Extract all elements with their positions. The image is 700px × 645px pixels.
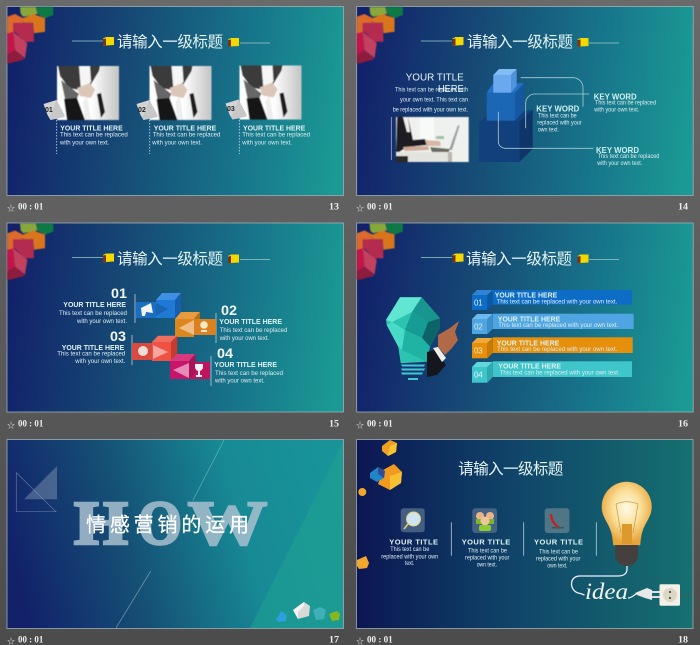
column 3: own text.	[547, 562, 568, 569]
chart: stacked blocks	[479, 69, 533, 162]
bar 04: 04	[474, 371, 483, 380]
text 01: This text can be replaced	[59, 310, 128, 317]
icon: corner cubes	[357, 224, 403, 280]
key word 1: KEY WORD	[536, 104, 579, 114]
left text block: This text can be replaced with	[395, 86, 468, 93]
footer 14: 14	[678, 202, 688, 212]
footer 14	[356, 202, 688, 213]
key word 3: with your own text.	[596, 160, 643, 167]
footer 14: ☆	[356, 204, 364, 213]
title	[72, 33, 270, 51]
text 01: YOUR TITLE HERE	[63, 300, 126, 309]
left text block: be replaced with your own text.	[393, 106, 468, 113]
key word 2: with your own text.	[593, 107, 640, 114]
column 3: This text can be	[539, 548, 578, 555]
watermark: HOW: W	[188, 490, 267, 558]
panel: slide 16	[356, 223, 693, 430]
panel: slide 18	[356, 440, 693, 645]
footer 16: 16	[678, 420, 688, 430]
bar 01: YOUR TITLE HERE	[495, 291, 557, 300]
bar 03	[472, 337, 633, 358]
panel: slide 15	[7, 223, 344, 430]
item 01: This text can be replaced	[60, 132, 128, 139]
footer 17	[7, 636, 339, 645]
text 04: 04	[217, 345, 233, 361]
column 1: text.	[405, 560, 415, 567]
key word 1: replaced with your	[537, 119, 582, 126]
column 1: This text can be	[390, 546, 430, 553]
panel: slide 14	[356, 6, 693, 213]
footer 13: 00 : 01	[18, 202, 44, 212]
title: 请输入一级标题	[117, 250, 223, 268]
item 03: 03	[227, 106, 235, 113]
text 03: 03	[110, 328, 126, 344]
key word 1: This text can be	[538, 112, 577, 119]
key word 3: This text can be replaced	[598, 153, 660, 160]
text 03	[57, 328, 126, 365]
title: 请输入一级标题	[458, 460, 563, 478]
text 01: with your own text.	[76, 318, 127, 325]
footer 15: ☆	[7, 421, 15, 430]
item 03: This text can be replaced	[242, 132, 311, 139]
step graphic 03 red	[132, 335, 177, 365]
text 02: YOUR TITLE HERE	[219, 317, 282, 326]
panel: slide 13	[7, 6, 344, 213]
key word 1: own text.	[538, 126, 559, 133]
bar 01: This text can be replaced with your own text.	[497, 298, 618, 305]
connector lines	[498, 78, 593, 148]
text 04: This text can be replaced	[215, 370, 284, 377]
column 3: YOUR TITLE	[534, 537, 583, 546]
title: 请输入一级标题	[467, 33, 573, 51]
icon: small cubes	[276, 602, 340, 622]
item 01: YOUR TITLE HERE	[60, 123, 123, 132]
title	[72, 250, 270, 268]
key word 3: KEY WORD	[596, 145, 639, 155]
item 03: with your own text.	[241, 139, 292, 146]
footer 15: 15	[329, 420, 339, 430]
item 02: with your own text.	[151, 139, 202, 146]
column 2: This text can be	[468, 548, 507, 555]
left text block: YOUR TITLE	[406, 73, 464, 84]
item 02: YOUR TITLE HERE	[154, 123, 216, 132]
column 1	[381, 508, 439, 567]
text 04	[214, 345, 284, 384]
icon: corner cubes	[7, 7, 53, 63]
column 2: YOUR TITLE	[462, 537, 510, 546]
triangles decoration	[16, 466, 57, 512]
key word 1	[536, 104, 582, 133]
text 01: 01	[111, 285, 127, 301]
footer 16	[356, 420, 688, 430]
bar 04	[472, 361, 632, 383]
title	[421, 250, 619, 268]
text 02	[219, 302, 288, 342]
photo: laptop	[391, 117, 469, 162]
footer 15	[7, 420, 339, 430]
text 03: YOUR TITLE HERE	[62, 343, 124, 352]
text 02: 02	[221, 302, 237, 318]
icon: idea wire and plug	[572, 566, 693, 606]
bar 04: This text can be replaced with your own text.	[500, 369, 620, 376]
panel: slide 17	[7, 440, 344, 645]
column 1: replaced with your own	[381, 554, 439, 561]
step graphic 02 orange	[175, 312, 216, 343]
bar 02: YOUR TITLE HERE	[498, 314, 560, 323]
footer 13: 13	[329, 202, 339, 212]
icon: orange cubes	[357, 440, 402, 569]
column 2: own text.	[477, 562, 497, 569]
bar 01	[472, 290, 632, 310]
text 03: This text can be replaced	[57, 350, 126, 358]
step graphic 04 pink	[170, 354, 211, 386]
text 03: with your own text.	[74, 358, 126, 365]
text 04: YOUR TITLE HERE	[214, 360, 277, 369]
column 2: replaced with your	[465, 554, 509, 561]
icon: corner cubes	[357, 7, 403, 63]
text 02: This text can be replaced	[220, 327, 288, 334]
text 01	[59, 285, 128, 325]
footer 15: 00 : 01	[18, 420, 44, 430]
heading: 情感营销的运用	[86, 514, 249, 537]
item 02: 02	[138, 107, 146, 114]
item 03: YOUR TITLE HERE	[243, 123, 305, 132]
bar 02	[472, 314, 634, 334]
bar 04: YOUR TITLE HERE	[498, 362, 561, 371]
text 04: with your own text.	[214, 378, 265, 384]
item 01: 01	[45, 107, 53, 114]
left text block	[393, 73, 469, 113]
title: 请输入一级标题	[117, 33, 223, 51]
title: 请输入一级标题	[466, 250, 572, 268]
watermark: HOW	[74, 490, 267, 558]
footer 14: 00 : 01	[367, 202, 393, 212]
footer 16: 00 : 01	[367, 420, 393, 430]
column 2	[462, 508, 510, 569]
item 01: with your own text.	[59, 139, 110, 146]
footer 16: ☆	[356, 421, 364, 430]
bar 01: 01	[474, 299, 483, 308]
key word 2: KEY WORD	[594, 92, 637, 102]
title	[421, 33, 619, 51]
step graphic 01 blue	[135, 293, 181, 323]
key word 2	[593, 92, 656, 114]
footer 13	[7, 202, 339, 213]
bar 03: YOUR TITLE HERE	[497, 338, 559, 347]
key word 3	[596, 145, 660, 167]
watermark: HOW: O	[138, 490, 182, 558]
column 3	[534, 508, 583, 569]
bar 02: 02	[474, 323, 483, 332]
bar 02: This text can be replaced with your own text.	[498, 322, 619, 329]
watermark: HOW: H	[74, 490, 128, 558]
column 3: replaced with your	[536, 555, 580, 562]
item 01	[44, 66, 128, 154]
column 1: YOUR TITLE	[389, 537, 438, 546]
item 02	[136, 66, 221, 154]
text 02: with your own text.	[219, 335, 269, 342]
bar 03: This text can be replaced with your own text.	[497, 346, 618, 353]
key word 2: This text can be replaced	[595, 100, 656, 107]
icon: idea wire and plug: idea	[585, 579, 628, 604]
left text block: HERE	[438, 84, 464, 95]
bar 03: 03	[474, 347, 483, 356]
icon: light bulb	[602, 482, 652, 566]
footer 18	[356, 636, 688, 645]
footer 13: ☆	[7, 204, 15, 213]
item 03	[226, 66, 311, 154]
icon: corner cubes	[7, 224, 53, 280]
icon: low-poly bulb with hand	[386, 297, 459, 380]
left text block: your own text. This text can	[400, 96, 469, 103]
item 02: This text can be replaced	[153, 132, 221, 139]
